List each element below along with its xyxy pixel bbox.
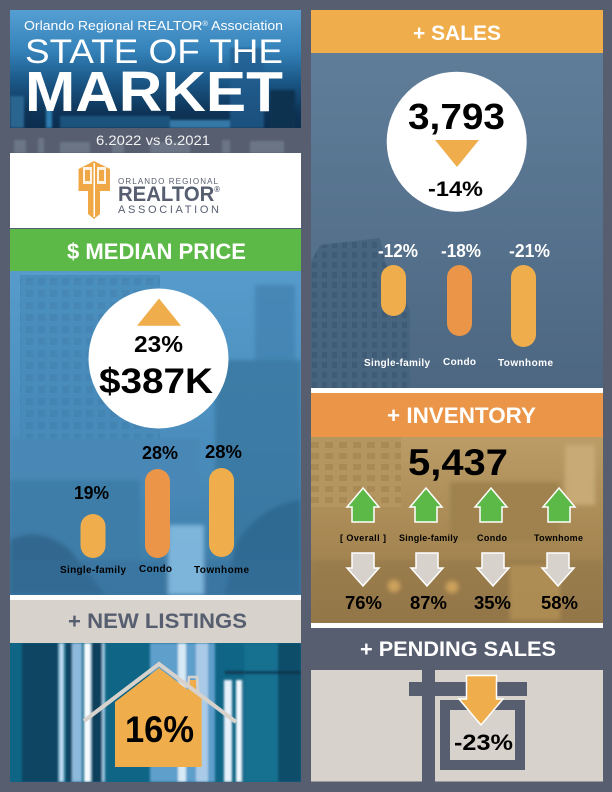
divider band bbox=[311, 388, 603, 393]
sales change: -14% bbox=[428, 178, 483, 201]
chart: median price by type: 28% bbox=[142, 443, 178, 463]
heading: sales: + SALES bbox=[413, 22, 501, 45]
panel: median price bbox=[10, 271, 301, 595]
logo text: ASSOCIATION bbox=[118, 204, 219, 216]
inventory percentages: 58% bbox=[541, 592, 578, 613]
chart: median price by type: Condo bbox=[139, 564, 172, 575]
inventory category labels: Townhome bbox=[534, 533, 583, 543]
heading: new listings: + NEW LISTINGS bbox=[68, 610, 247, 633]
heading: new listings bbox=[10, 600, 301, 643]
inventory percentages: 87% bbox=[410, 592, 447, 613]
chart: median price by type: Townhome bbox=[194, 565, 249, 576]
icon: down triangle bbox=[435, 140, 479, 167]
divider band bbox=[311, 623, 603, 628]
chart: median price by type: Single-family bbox=[60, 565, 126, 576]
chart: sales by type: -18% bbox=[441, 241, 481, 261]
inventory percentages: 76% bbox=[345, 592, 382, 613]
logo text: ® bbox=[214, 185, 220, 194]
inventory category labels: [ Overall ] bbox=[340, 533, 386, 543]
chart: median price by type: 19% bbox=[74, 483, 109, 503]
icon: sign post bbox=[409, 682, 527, 770]
title line one: STATE OF THE bbox=[25, 33, 283, 71]
header organisation line: Association bbox=[208, 18, 283, 33]
pending sales value: -23% bbox=[454, 730, 513, 755]
callout: median price circle bbox=[88, 288, 228, 428]
inventory value: 5,437 bbox=[408, 442, 508, 483]
header organisation line: ® bbox=[202, 20, 209, 28]
inventory percentages bbox=[345, 592, 578, 613]
icons: up arrows bbox=[347, 488, 575, 522]
panel: header bbox=[10, 10, 301, 153]
median price value: $387K bbox=[99, 362, 213, 401]
callout: sales circle bbox=[387, 72, 527, 212]
chart: median price by type: 28% bbox=[205, 442, 242, 462]
divider band bbox=[10, 595, 301, 600]
inventory category labels bbox=[340, 533, 583, 543]
median change: 23% bbox=[134, 331, 183, 357]
header organisation line: Orlando Regional REALTOR bbox=[24, 18, 189, 33]
panel: inventory bbox=[311, 437, 603, 623]
heading: inventory: + INVENTORY bbox=[387, 403, 536, 428]
sales value: 3,793 bbox=[408, 96, 505, 137]
heading: sales bbox=[311, 10, 603, 53]
chart: sales by type bbox=[364, 241, 553, 369]
logo text: ORLANDO REGIONAL bbox=[118, 177, 219, 186]
chart: sales by type: Single-family bbox=[364, 358, 430, 369]
icon: house bbox=[84, 664, 236, 767]
chart: sales by type: Townhome bbox=[498, 358, 553, 369]
panel: logo bbox=[10, 153, 301, 228]
icons: down arrows bbox=[347, 553, 574, 586]
new listings value: 16% bbox=[125, 709, 194, 750]
logo text: REALTOR bbox=[118, 183, 218, 206]
logo text bbox=[118, 177, 220, 216]
date comparison: 6.2022 vs 6.2021 bbox=[96, 132, 210, 148]
inventory percentages: 35% bbox=[474, 592, 511, 613]
heading: median price: $ MEDIAN PRICE bbox=[67, 239, 246, 264]
icon: down arrow bbox=[459, 676, 503, 725]
chart: sales by type: -21% bbox=[509, 241, 550, 261]
icon: up triangle bbox=[137, 298, 181, 326]
title line two: MARKET bbox=[25, 60, 283, 124]
chart: median price by type bbox=[60, 442, 249, 576]
panel: sales bbox=[311, 53, 603, 388]
chart: sales by type: Condo bbox=[443, 357, 476, 368]
icon: key house bbox=[78, 161, 110, 219]
panel: pending sales bbox=[311, 670, 603, 782]
panel: new listings bbox=[10, 643, 301, 782]
chart: sales by type: -12% bbox=[378, 241, 418, 261]
heading: pending sales: + PENDING SALES bbox=[360, 638, 556, 661]
inventory category labels: Condo bbox=[477, 533, 508, 543]
inventory category labels: Single-family bbox=[399, 533, 458, 543]
heading: inventory bbox=[311, 393, 603, 437]
heading: median price bbox=[10, 229, 301, 271]
